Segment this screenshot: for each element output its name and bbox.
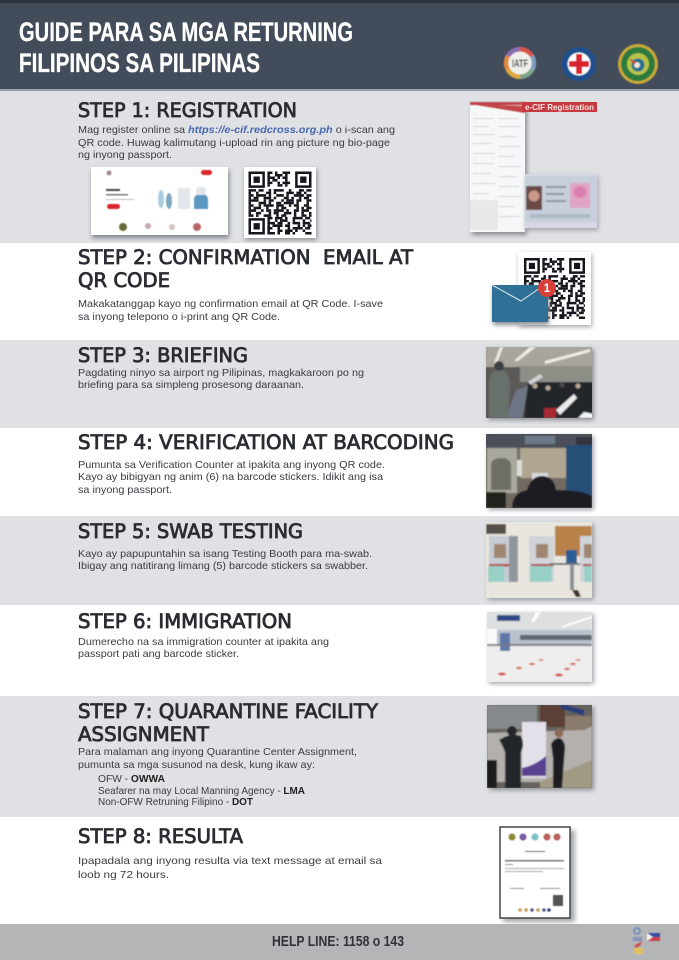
text block: step 2 (78, 298, 383, 323)
icon: IATF logo: IATF (512, 58, 528, 70)
text block: step 5 (78, 548, 372, 572)
text block: step 1 (78, 124, 395, 161)
text block: step 3 (78, 367, 364, 391)
heading: step 8: STEP 8: RESULTA (78, 825, 243, 848)
panel: step 5 (0, 516, 679, 605)
text block: step 8 (78, 855, 382, 881)
text block: step 2: Makakatanggap kayo ng confirmation email at QR Code. I-save (78, 298, 383, 310)
photo: immigration hall (485, 610, 595, 684)
heading: step 2 (78, 246, 413, 292)
QR code with email icon (492, 252, 592, 327)
text block: step 7 (78, 746, 357, 771)
text block: step 4: sa inyong passport. (78, 484, 172, 496)
text block: step 1: ng inyong passport. (78, 149, 172, 161)
icon: notification badge: 1 (544, 283, 551, 295)
heading: step 3: STEP 3: BRIEFING (78, 344, 248, 367)
heading: step 1: STEP 1: REGISTRATION (78, 99, 297, 122)
panel: step 6 (78, 611, 597, 687)
passport image (525, 174, 598, 230)
photo: briefing crowd (484, 345, 594, 420)
text block: step 1: QR code. Huwag kalimutang i-upload rin ang picture ng bio-page (78, 137, 390, 149)
icon: IATF logo (504, 47, 536, 79)
title (19, 17, 353, 78)
red label: e-CIF Registration (525, 102, 594, 112)
text block: step 4: Kayo ay bibigyan ng anim (6) na barcode stickers. Idikit ang isa (78, 471, 383, 483)
panel: footer help line (0, 924, 679, 960)
photo: quarantine desk (485, 703, 595, 790)
photo: verification counter (484, 432, 594, 510)
text block: step 2: sa inyong telepono o i-print ang QR Code. (78, 311, 280, 323)
icon: Philippine flag (647, 933, 660, 941)
icon: Department of Health seal (618, 44, 658, 84)
icon: small tourism logo (633, 928, 643, 954)
panel: step 7 (0, 696, 679, 817)
heading: step 2: STEP 2: CONFIRMATION EMAIL AT (78, 246, 413, 269)
heading: step 2: QR CODE (78, 269, 170, 292)
text block: step 5: Ibigay ang natitirang limang (5) barcode stickers sa swabber. (78, 560, 368, 572)
panel: step 1 (0, 91, 679, 243)
list: desks: Non-OFW Retruning Filipino - DOT (98, 796, 254, 808)
panel: header band (0, 0, 679, 91)
text block: step 6 (78, 636, 329, 660)
text block: step 5: Kayo ay papupuntahin sa isang Testing Booth para ma-swab. (78, 548, 372, 560)
text block: step 7: pumunta sa mga susunod na desk, kung ikaw ay: (78, 759, 315, 771)
heading: step 5: STEP 5: SWAB TESTING (78, 520, 303, 543)
panel: step 8 (0, 817, 679, 924)
icon: Philippine Red Cross logo (562, 47, 596, 81)
text block: step 6: passport pati ang barcode sticker. (78, 648, 239, 660)
e-CIF form screenshot (470, 102, 527, 235)
heading: step 7: ASSIGNMENT (78, 723, 209, 746)
list: desks (98, 773, 305, 808)
text block: step 4: Pumunta sa Verification Counter at ipakita ang inyong QR code. (78, 459, 385, 471)
QR code (244, 167, 317, 240)
text block: step 1: Mag register online sa https://e-cif.redcross.org.ph o i-scan ang (78, 124, 395, 136)
heading: step 7 (78, 700, 378, 746)
title: FILIPINOS SA PILIPINAS (19, 48, 260, 78)
list: desks: OFW - OWWA (98, 773, 165, 785)
text block: step 6: Dumerecho na sa immigration counter at ipakita ang (78, 636, 329, 648)
panel: step 3 (0, 340, 679, 428)
title: GUIDE PARA SA MGA RETURNING (19, 17, 353, 47)
panel: step 4 (78, 433, 597, 513)
text block: step 3: Pagdating ninyo sa airport ng Pilipinas, magkakaroon po ng (78, 367, 364, 379)
heading: step 7: STEP 7: QUARANTINE FACILITY (78, 700, 378, 723)
heading: step 6: STEP 6: IMMIGRATION (78, 610, 292, 633)
website screenshot (91, 167, 229, 238)
text block: step 7: Para malaman ang inyong Quarantine Center Assignment, (78, 746, 357, 758)
help line text: HELP LINE: 1158 o 143 (272, 934, 404, 950)
certificate document (500, 827, 575, 922)
text block: step 8: Ipapadala ang inyong resulta via text message at email sa (78, 855, 382, 867)
list: desks: Seafarer na may Local Manning Agency - LMA (98, 785, 305, 797)
text block: step 4 (78, 459, 385, 496)
icon: envelope (492, 285, 549, 325)
panel: step 2 (0, 243, 679, 340)
text block: step 8: loob ng 72 hours. (78, 869, 169, 881)
photo: testing booths (484, 520, 594, 600)
text block: step 3: briefing para sa simpleng prosesong daraanan. (78, 379, 304, 391)
heading: step 4: STEP 4: VERIFICATION AT BARCODING (78, 431, 454, 454)
